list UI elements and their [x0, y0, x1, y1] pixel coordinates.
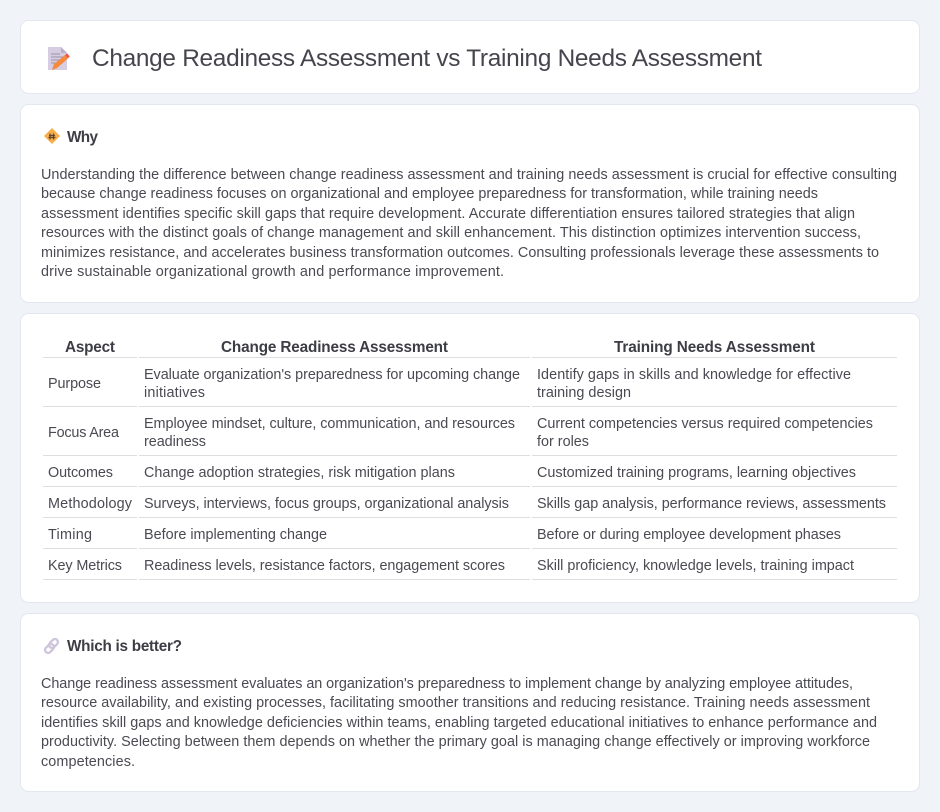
table row: key metrics: Key Metrics — [48, 558, 122, 574]
text block: why paragraph: resources with the distinct goals of change management and skill enhancement. This distinction optimizes intervention success, — [41, 225, 861, 241]
text block: which is better paragraph — [41, 676, 877, 770]
table row: purpose: Identify gaps in skills and knowledge for effective — [537, 367, 851, 383]
text block: why paragraph: Understanding the difference between change readiness assessment and training needs assessment is crucial for effective consulting — [41, 167, 897, 183]
table row: methodology: Skills gap analysis, performance reviews, assessments — [537, 496, 886, 512]
table header row: Training Needs Assessment — [614, 339, 815, 356]
table row: focus area — [48, 416, 873, 450]
panel: which is better — [20, 614, 920, 792]
heading: why: Why — [67, 129, 98, 146]
table row: methodology: Surveys, interviews, focus groups, organizational analysis — [144, 496, 509, 512]
text block: which is better paragraph: competencies. — [41, 754, 135, 770]
text block: why paragraph: drive sustainable organizational growth and performance improvement. — [41, 264, 504, 280]
text block: which is better paragraph: productivity. Selecting between them depends on whether the primary goal is managing change effectively or improving workforce — [41, 734, 870, 750]
table row: purpose: Evaluate organization's preparedness for upcoming change — [144, 367, 520, 383]
table row: key metrics: Skill proficiency, knowledge levels, training impact — [537, 558, 854, 574]
table row: outcomes: Customized training programs, learning objectives — [537, 465, 856, 481]
text block: why paragraph — [41, 167, 897, 280]
table row: purpose — [48, 367, 851, 401]
table row: timing: Before implementing change — [144, 527, 327, 543]
table row: focus area: readiness — [144, 434, 206, 450]
panel: why — [20, 104, 920, 302]
table row: outcomes: Outcomes — [48, 465, 113, 481]
table row: purpose: training design — [537, 385, 631, 401]
text block: which is better paragraph: identifies skill gaps and knowledge deficiencies within teams, enabling targeted educational initiatives to enhance performance and — [41, 715, 877, 731]
table header row: Aspect — [65, 339, 115, 356]
table row: key metrics: Readiness levels, resistance factors, engagement scores — [144, 558, 505, 574]
text block: why paragraph: minimizes resistance, and accelerates business transformation outcomes. Consulting professionals leverage these assessments to — [41, 245, 879, 261]
table row: focus area: Employee mindset, culture, communication, and resources — [144, 416, 515, 432]
text block: why paragraph: because change readiness focuses on organizational and employee preparedness for transformation, while training needs — [41, 186, 818, 202]
table row: purpose: Purpose — [48, 376, 101, 392]
title: Change Readiness Assessment vs Training Needs Assessment — [92, 45, 762, 72]
text block: why paragraph: assessment identifies specific skill gaps that require development. Accurate differentiation ensures tailored strategies that align — [41, 206, 855, 222]
icon: chain link — [44, 638, 59, 654]
table row: methodology — [48, 496, 886, 512]
table row: outcomes: Change adoption strategies, risk mitigation plans — [144, 465, 455, 481]
text block: which is better paragraph: resource availability, and existing processes, facilitating smoother transitions and reducing resistance. Training needs assessment — [41, 695, 870, 711]
icon: memo with pencil — [48, 47, 70, 70]
table row: focus area: for roles — [537, 434, 589, 450]
table row: timing: Timing — [48, 527, 92, 543]
table header row — [65, 339, 815, 356]
heading: which is better: Which is better? — [67, 638, 182, 655]
panel: title header — [20, 20, 920, 94]
table row: methodology: Methodology — [48, 496, 133, 512]
text block: which is better paragraph: Change readiness assessment evaluates an organization's preparedness to implement change by analyzing employee attitudes, — [41, 676, 853, 692]
table row: key metrics — [48, 558, 854, 574]
icon: warning diamond — [44, 128, 60, 144]
table row: timing — [48, 527, 841, 543]
table header row: Change Readiness Assessment — [221, 339, 448, 356]
table row: outcomes — [48, 465, 856, 481]
panel: comparison table — [20, 314, 920, 602]
table row: focus area: Current competencies versus required competencies — [537, 416, 873, 432]
table row: timing: Before or during employee development phases — [537, 527, 841, 543]
table row: purpose: initiatives — [144, 385, 205, 401]
table row: focus area: Focus Area — [48, 425, 119, 441]
